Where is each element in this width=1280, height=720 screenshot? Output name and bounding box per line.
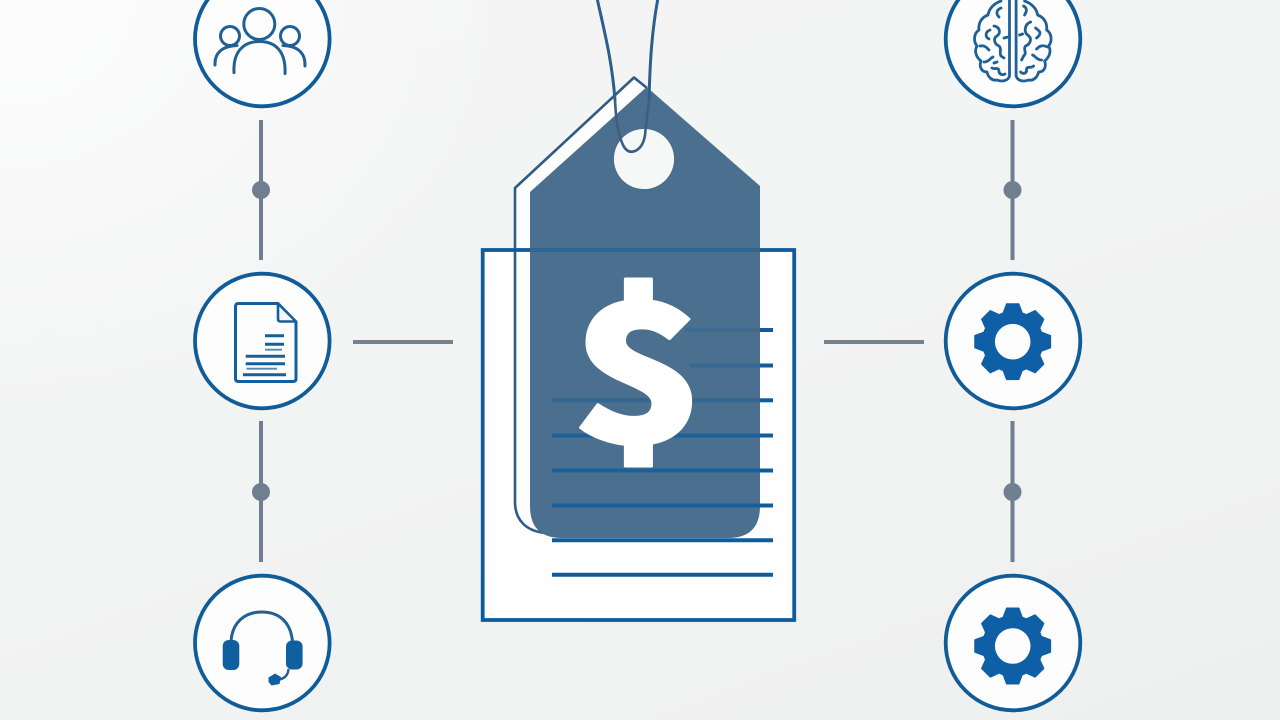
central price tag on document — [483, 0, 794, 620]
brain left hemisphere — [975, 0, 1010, 81]
brain right hemisphere — [1016, 0, 1051, 81]
icon: people — [195, 0, 330, 106]
document border — [483, 250, 794, 620]
tag border overlay on document top — [530, 248, 760, 252]
icon: document — [195, 274, 330, 408]
document sheet — [483, 250, 794, 620]
tag body — [530, 87, 760, 538]
tag hole fill — [614, 129, 674, 189]
horizontal connector right — [824, 340, 924, 344]
icon: gear bottom — [946, 576, 1080, 710]
horizontal connector left — [353, 340, 453, 344]
icon: gear middle — [946, 274, 1080, 408]
document text lines — [552, 330, 773, 575]
dollar sign: $ — [571, 220, 706, 498]
left connector: people to document — [252, 120, 270, 260]
right connector: gear to gear — [1004, 421, 1022, 562]
icon: headset — [195, 576, 330, 710]
right connector: brain to gear — [1004, 120, 1022, 260]
left connector: document to headset — [252, 421, 270, 562]
tag string — [597, 0, 658, 152]
icon: brain — [946, 0, 1080, 106]
tag back outline — [515, 78, 647, 533]
